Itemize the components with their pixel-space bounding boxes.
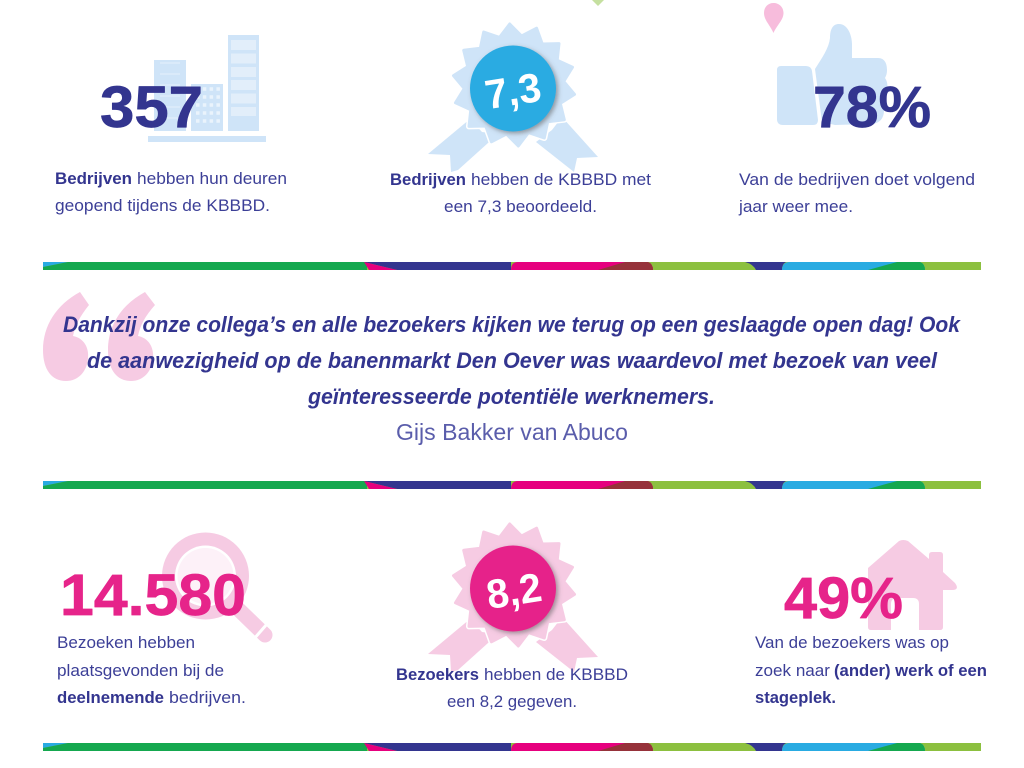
icon: magnifying glass (162, 532, 267, 640)
text: bedrijven beoordeeld (390, 171, 651, 216)
text: bedrijven deuren: hebben hun deuren (137, 170, 287, 188)
text: werk of stageplek (755, 634, 987, 707)
text: bedrijven beoordeeld: hebben de KBBBD met (471, 171, 651, 189)
text: bezoeken: plaatsgevonden bij de (57, 662, 224, 680)
text: bedrijven beoordeeld: een 7,3 beoordeeld. (444, 198, 597, 216)
number: 78%: 78% (813, 75, 931, 140)
text: quote author: Gijs Bakker van Abuco (396, 419, 628, 445)
icon: blue rosette (428, 24, 598, 172)
divider: colour bar bottom (43, 743, 981, 751)
text: volgend jaar (738, 171, 975, 216)
text: werk of stageplek: stageplek. (755, 689, 836, 707)
text: bedrijven deuren (55, 170, 287, 215)
text: bezoekers gegeven: een 8,2 gegeven. (447, 693, 577, 711)
panel: 14.580 bezoeken (57, 532, 267, 707)
text: quote body: Dankzij onze collega’s en alle bezoekers kijken we terug op een geslaagde open dag! Ook (63, 312, 962, 337)
text: quote body: geïnteresseerde potentiële werknemers. (307, 384, 715, 409)
divider: colour bar middle (43, 481, 981, 489)
text: bedrijven deuren: geopend tijdens de KBBBD. (55, 197, 270, 215)
text: bedrijven deuren: Bedrijven (55, 170, 132, 188)
icon: pink map pin (764, 3, 784, 33)
text: werk of stageplek: Van de bezoekers was op (755, 634, 949, 652)
panel: 7,3 beoordeling (390, 24, 651, 216)
panel: 49% werk (755, 540, 987, 707)
text: bezoeken: bedrijven. (169, 689, 246, 707)
panel: 357 bedrijven (55, 35, 287, 215)
divider: colour bar top (43, 262, 981, 270)
panel: quote (43, 292, 962, 445)
text: bezoekers gegeven: Bezoekers (396, 666, 479, 684)
icon: pink rosette (428, 524, 598, 672)
icon: house (868, 540, 957, 630)
icon: green map pin (592, 0, 604, 6)
text: volgend jaar: Van de bedrijven doet volgend (739, 171, 975, 189)
text: bezoeken: deelnemende (57, 689, 164, 707)
icon: pink rosette: 8,2 (483, 564, 545, 618)
text: werk of stageplek: zoek naar (755, 662, 831, 680)
text: quote body (63, 312, 962, 409)
number: 14.580: 14.580 (60, 563, 246, 628)
number: 357: 357 (100, 75, 203, 140)
icon: buildings (148, 35, 266, 142)
number: 49%: 49% (784, 566, 903, 631)
icon: blue rosette: 7,3 (482, 64, 544, 118)
text: werk of stageplek: (ander) werk of een (834, 662, 987, 680)
text: bezoeken: Bezoeken hebben (57, 634, 195, 652)
text: bedrijven beoordeeld: Bedrijven (390, 171, 466, 189)
text: bezoekers gegeven (396, 666, 628, 711)
text: bezoeken (57, 634, 246, 707)
text: quote body: de aanwezigheid op de banenmarkt Den Oever was waardevol met bezoek van veel (87, 348, 938, 373)
panel: 78% volgend jaar (738, 24, 975, 216)
icon: thumbs up (777, 24, 887, 125)
panel: 8,2 beoordeling (396, 524, 628, 711)
text: bezoekers gegeven: hebben de KBBBD (484, 666, 628, 684)
icon: quotation marks (43, 292, 155, 381)
text: volgend jaar: jaar weer mee. (738, 198, 853, 216)
